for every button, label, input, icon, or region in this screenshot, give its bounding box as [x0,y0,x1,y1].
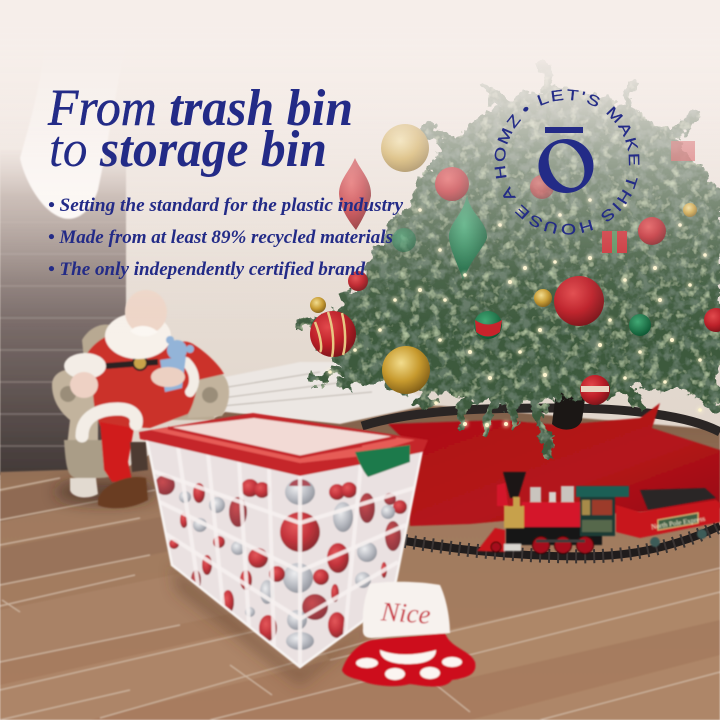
bullet three: • The only independently certified brand [48,259,366,280]
tree foliage [300,65,720,452]
cardboard dividers [153,447,414,667]
nice stocking [342,582,475,686]
tree trunk [552,392,586,430]
logo bar [545,127,583,133]
top haze [0,0,720,335]
santa beard [105,313,171,359]
soft floor shadows [55,480,392,686]
train locomotive [477,472,629,554]
title line two: to storage bin [49,121,327,178]
bin lid [139,413,428,476]
santa boot [98,477,148,508]
red tree skirt [388,403,720,526]
ornaments on tree [310,124,720,405]
circular logo badge [494,89,640,235]
santa head [125,290,167,334]
santa legs [100,422,134,482]
paw foot [342,633,475,686]
logo letter o [538,139,594,193]
bullet list [48,195,404,280]
photo background: wall [0,0,720,480]
christmas tree [300,65,720,452]
armchair [52,325,229,497]
bin body [147,440,422,667]
teddy bear [160,336,194,392]
brick wall [0,150,126,475]
track front arc [405,526,720,556]
santa body [84,334,224,428]
fairy lights [328,198,707,427]
bullet two: • Made from at least 89% recycled materials [48,227,393,248]
bullet one: • Setting the standard for the plastic industry [48,195,404,216]
paw toes and pad [356,650,462,680]
fur trim on coat [82,409,136,436]
badge ring text: • LET'S MAKE THIS HOUSE A HOMZ [494,89,640,235]
track back arc [362,408,720,432]
baseboard [220,362,432,424]
storage bin [139,413,428,667]
white cuff [363,582,450,638]
plastic frost over ornaments [158,477,406,648]
green lid handle [355,445,410,477]
toy train [477,472,720,554]
bin edge highlight [147,440,422,667]
title: From trash bin [47,80,353,137]
santa belt and buckle [106,362,158,366]
cuff label: Nice: Nice [379,596,432,630]
santa hand [151,367,185,387]
train tender: North Pole Express [651,515,706,531]
train tender [616,488,720,547]
wooden floor [0,405,720,720]
santa figurine [52,290,229,508]
hanging white stocking [20,50,124,219]
ornaments inside bin [147,440,422,667]
